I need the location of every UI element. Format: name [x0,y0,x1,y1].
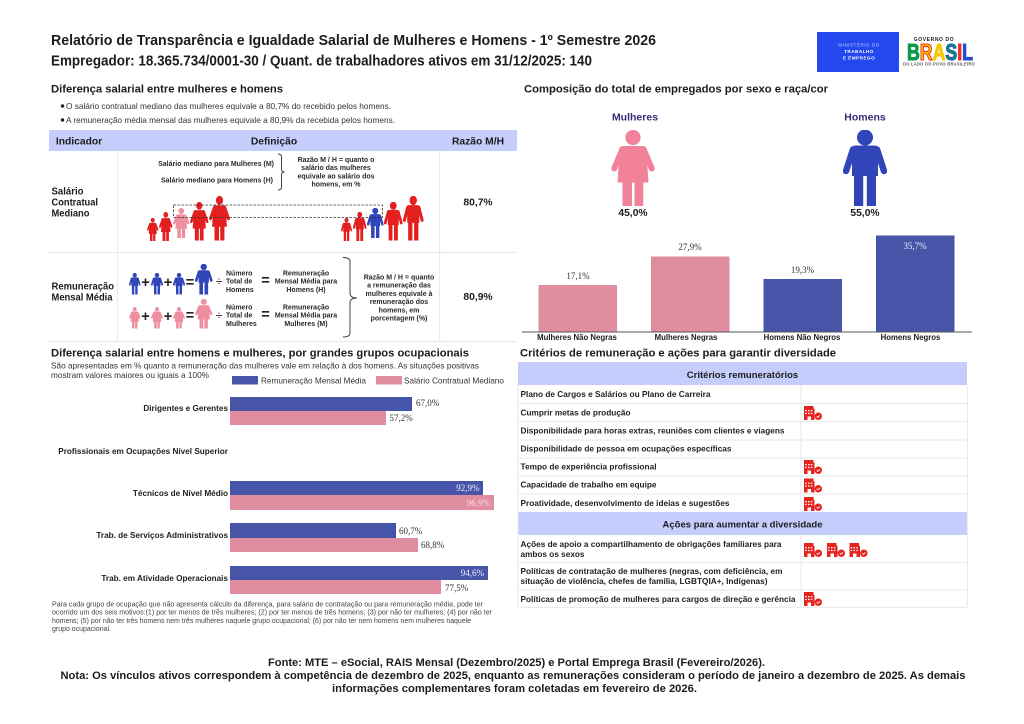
formula: men: = [261,273,270,289]
pictogram: mulheres: Mulheres [612,112,658,124]
category: técnicos: 92,9% [456,483,480,493]
criterion rows: Disponibilidade de pessoa em ocupações específicas [520,444,732,454]
action rows: Políticas de contratação de mulheres (negras, com deficiência, em [520,567,782,576]
formula: men [130,264,337,294]
row label: salário contratual mediano: Salário [52,186,84,198]
definition text: salário mediano: homens, em % [311,182,361,188]
category: técnicos: 96,9% [467,498,490,508]
formula: women: = [261,307,270,323]
definition text: salário mediano: Razão M / H = quanto o [298,157,374,164]
panel: criteria table: Critérios remuneratórios [687,370,798,381]
category: operacionais: Trab. em Atividade Operacionais [101,574,228,583]
value: 80,9%: 80,9% [463,292,493,303]
category: administrativos: 68,8% [421,540,445,550]
brace and ratio explanation: homens, em [379,307,419,314]
footnote [52,600,493,633]
brace and ratio explanation: remuneração dos [370,299,428,306]
criterion rows: Cumprir metas de produção [520,408,630,418]
legend [232,375,504,385]
bar chart: composição: Homens Negros [881,333,941,342]
footnote: homens; (5) por não ter três homens nem três mulheres naquele grupo ocupacional; (6) por não ter nem homens nem mulheres naquele [52,617,471,625]
category: dirigentes: Dirigentes e Gerentes [143,404,228,413]
legend: Salário Contratual Mediano [404,375,504,385]
title: Empregador: 18.365.734/0001-30 / Quant. de trabalhadores ativos em 31/12/2025: 140 [51,54,592,70]
row label: salário contratual mediano: Mediano [52,208,90,220]
title [51,33,656,70]
formula: women: Número [226,304,252,312]
icons: men median row [342,196,422,241]
heading: critérios: Critérios de remuneração e ações para garantir diversidade [520,348,836,360]
category: técnicos [133,481,494,510]
category: profissionais: Profissionais em Ocupações Nível Superior [58,447,229,456]
row label: salário contratual mediano: Contratual [52,198,98,208]
panel: indicator table: Indicador [56,136,102,148]
formula: men: Número [226,270,252,278]
brace and ratio explanation: porcentagem (%) [371,316,427,322]
brace and ratio explanation: a remuneração das [367,283,431,290]
formula: women: Total de [226,312,252,320]
logo: Governo do Brasil: GOVERNO DO [914,37,954,43]
formula: men: = [186,275,194,291]
source and note: Nota: Os vínculos ativos correspondem à competência de dezembro de 2025, enquanto as remunerações consideram o período de janeiro a dezembro de 2025. As demais [60,670,966,682]
action rows: ambos os sexos [520,550,585,559]
source and note [60,657,966,695]
category: operacionais [101,566,488,594]
definition text: salário mediano: Salário mediano para Mulheres (M) [158,161,274,168]
text block: chart subtitle: São apresentadas em % quanto a remuneração das mulheres vale em relação à dos homens. As situações positivas [51,360,479,370]
criterion rows: Capacidade de trabalho em equipe [520,480,657,490]
action rows: Políticas de promoção de mulheres para cargos de direção e gerência [520,595,796,604]
formula: men: Remuneração [283,270,329,278]
category: dirigentes: 67,0% [416,398,440,408]
legend: Remuneração Mensal Média [261,375,366,385]
bullet text block: A remuneração média mensal das mulheres equivale a 80,9% da recebida pelos homens. [66,116,395,125]
formula: men: Homens [226,287,254,294]
criterion rows: Plano de Cargos e Salários ou Plano de Carreira [520,390,711,399]
bar chart: composição: 17,1% [566,271,590,281]
bar chart: grupos ocupacionais [58,397,494,594]
pictogram: mulheres [612,112,658,219]
pictogram: homens [844,112,886,219]
heading: composição: Composição do total de empregados por sexo e raça/cor [524,84,829,96]
formula: women: Remuneração [283,304,329,312]
action rows: Ações de apoio a compartilhamento de obrigações familiares para [520,540,782,549]
heading: grupos ocupacionais: Diferença salarial entre homens e mulheres, por grandes grupos ocupacionais [51,348,469,360]
icons: actions [804,543,868,606]
footnote: grupo ocupacional. [52,625,111,633]
row label: remuneração mensal média: Remuneração [52,282,114,292]
text block: chart subtitle [51,360,479,380]
bullet text block: O salário contratual mediano das mulheres equivale a 80,7% do recebido pelos homens. [66,102,391,111]
formula: men: Mensal Média para [275,278,337,286]
formula: men: + [164,275,172,291]
action rows [520,540,796,604]
brace and ratio explanation: Razão M / H = quanto [364,274,434,282]
footnote: ocorrido um dos seis motivos:(1) por ter menos de três mulheres; (2) por ter menos de três homens; (3) por não ter mulheres; (4) por não ter [52,609,493,617]
logo: Governo do Brasil: BRASIL [907,39,973,65]
definition text: salário mediano: Salário mediano para Homens (H) [161,178,273,184]
category: operacionais: 94,6% [461,568,484,578]
logo: Ministério do Trabalho e Emprego: E EMPREGO [843,56,875,60]
icons: criteria [804,406,822,511]
formula: men: Homens (H) [286,287,326,294]
panel: indicator table [49,130,517,342]
value: 80,7%: 80,7% [463,198,493,208]
panel: criteria table: Ações para aumentar a diversidade [662,520,822,530]
bar chart: composição: Homens Não Negros [764,333,841,342]
icons: women median row [148,196,228,241]
pictogram: homens: 55,0% [850,208,880,219]
heading: diferença salarial: Diferença salarial entre mulheres e homens [51,84,283,96]
footnote: Para cada grupo de ocupação que não apresenta cálculo da diferença, para salário de contratação ou para remuneração média, pode ter [52,600,484,608]
pictogram: homens: Homens [844,112,886,124]
formula: women: + [164,309,172,325]
definition text: salário mediano: salário das mulheres [301,165,371,172]
panel: indicator table: Definição [251,136,297,148]
definition text: salário mediano: equivale ao salário dos [297,173,375,180]
logo: Ministério do Trabalho e Emprego: TRABALHO [844,49,874,54]
bar chart: composição: 35,7% [903,241,927,251]
formula: men: + [141,275,150,291]
text block: chart subtitle: mostram valores maiores ou iguais a 100% [51,370,210,380]
formula: women: = [186,308,194,324]
brace and ratio explanation: mulheres equivale à [366,291,433,298]
bullet text block [61,102,395,125]
criterion rows: Disponibilidade para horas extras, reuniões com clientes e viagens [520,426,785,436]
criterion rows [520,390,785,508]
formula: women [130,299,337,328]
criterion rows: Proatividade, desenvolvimento de ideias e sugestões [520,499,730,508]
formula: men: ÷ [216,274,223,288]
bar chart: composição: Mulheres Não Negras [537,333,618,342]
category: administrativos: Trab. de Serviços Administrativos [96,531,228,540]
logo: Governo do Brasil: DO LADO DO POVO BRASILEIRO [903,62,976,66]
category: administrativos: 60,7% [399,526,423,536]
formula: men: Total de [226,278,252,286]
criterion rows: Tempo de experiência profissional [520,462,656,472]
logo: Ministério do Trabalho e Emprego [817,32,899,72]
category: dirigentes [143,397,440,425]
formula: women: Mulheres [226,321,257,328]
brace and ratio explanation [343,258,434,337]
row label: remuneração mensal média [52,282,114,304]
category: operacionais: 77,5% [445,583,469,593]
bar chart: composição [522,236,972,342]
formula: women: Mensal Média para [275,312,337,320]
bar chart: composição: 19,3% [791,265,815,275]
pictogram: mulheres: 45,0% [618,208,648,219]
title: Relatório de Transparência e Igualdade Salarial de Mulheres e Homens - 1º Semestre 2026 [51,33,656,49]
formula: women: Mulheres (M) [284,321,328,328]
source and note: Fonte: MTE – eSocial, RAIS Mensal (Dezembro/2025) e Portal Emprega Brasil (Fevereiro/2026). [268,657,765,669]
bar chart: composição: Mulheres Negras [655,333,718,342]
panel: criteria table [518,362,968,608]
panel: indicator table: Razão M/H [452,136,504,148]
logo: Ministério do Trabalho e Emprego: MINISTÉRIO DO [838,42,880,48]
category: técnicos: Técnicos de Nível Médio [133,489,228,498]
category: administrativos [96,523,445,552]
definition text: salário mediano [158,154,375,190]
source and note: informações complementares foram coletadas em fevereiro de 2026. [332,683,697,695]
formula: women: + [141,309,150,325]
action rows: situação de violência, chefes de família, LGBTQIA+, Indígenas) [520,577,768,586]
row label: salário contratual mediano [52,186,98,220]
category: dirigentes: 57,2% [390,413,413,423]
formula: women: ÷ [216,308,223,322]
row label: remuneração mensal média: Mensal Média [52,292,113,304]
bar chart: composição: 27,9% [678,242,702,252]
